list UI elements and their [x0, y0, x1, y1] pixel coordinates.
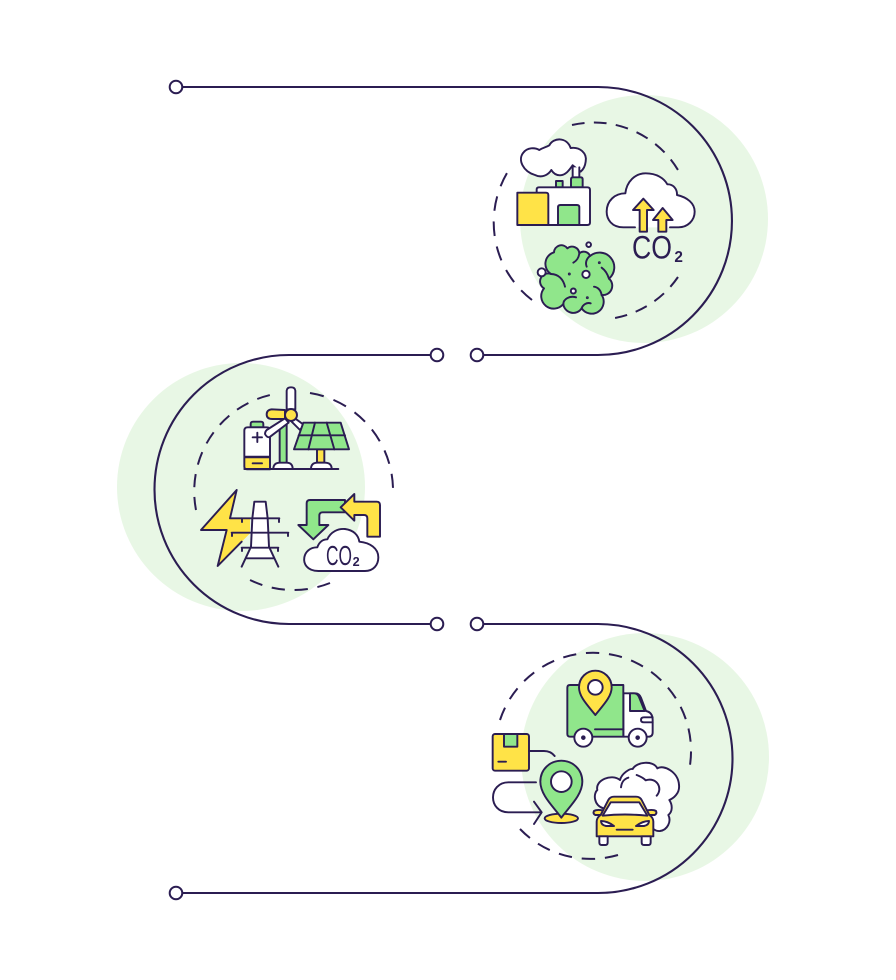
line end nodes	[170, 81, 483, 899]
dashed ring: step 2	[194, 393, 393, 590]
icon: smog cloud	[538, 242, 614, 314]
icon: wind turbine	[265, 387, 304, 469]
CO2 cloud label: CO	[326, 540, 352, 571]
icon: lightning bolt and pylon	[201, 490, 288, 567]
step 1 background circle	[520, 95, 768, 343]
icon: recycling arrows with CO2 cloud: 2	[353, 555, 360, 569]
icon: CO2 cloud with arrows: 2	[674, 249, 683, 266]
icon: car with exhaust smoke	[594, 763, 679, 845]
icon: parcel box with route	[493, 734, 582, 824]
green location pin	[540, 761, 582, 818]
connector line: top to step 2	[176, 87, 732, 355]
icon: CO2 cloud with arrows	[607, 173, 695, 266]
icon: recycling arrows with CO2 cloud	[298, 494, 380, 571]
step 1 icons: emissions	[517, 139, 695, 314]
icon: delivery truck	[567, 671, 653, 747]
step 2 icons: clean energy	[201, 387, 380, 571]
icon: factory with smoke	[517, 139, 590, 225]
step 2 background circle	[117, 363, 365, 611]
step 3 background circle	[521, 633, 769, 881]
icon: battery	[244, 422, 270, 469]
dashed ring: step 1	[494, 122, 678, 318]
step 3 icons: transport	[493, 671, 679, 845]
connector line: bottom	[176, 624, 732, 893]
dashed ring: step 3	[500, 653, 691, 859]
connector line: middle	[154, 355, 437, 624]
yellow location pin	[579, 671, 612, 715]
icon: solar panel	[244, 423, 349, 469]
CO2 label: CO	[632, 228, 672, 265]
